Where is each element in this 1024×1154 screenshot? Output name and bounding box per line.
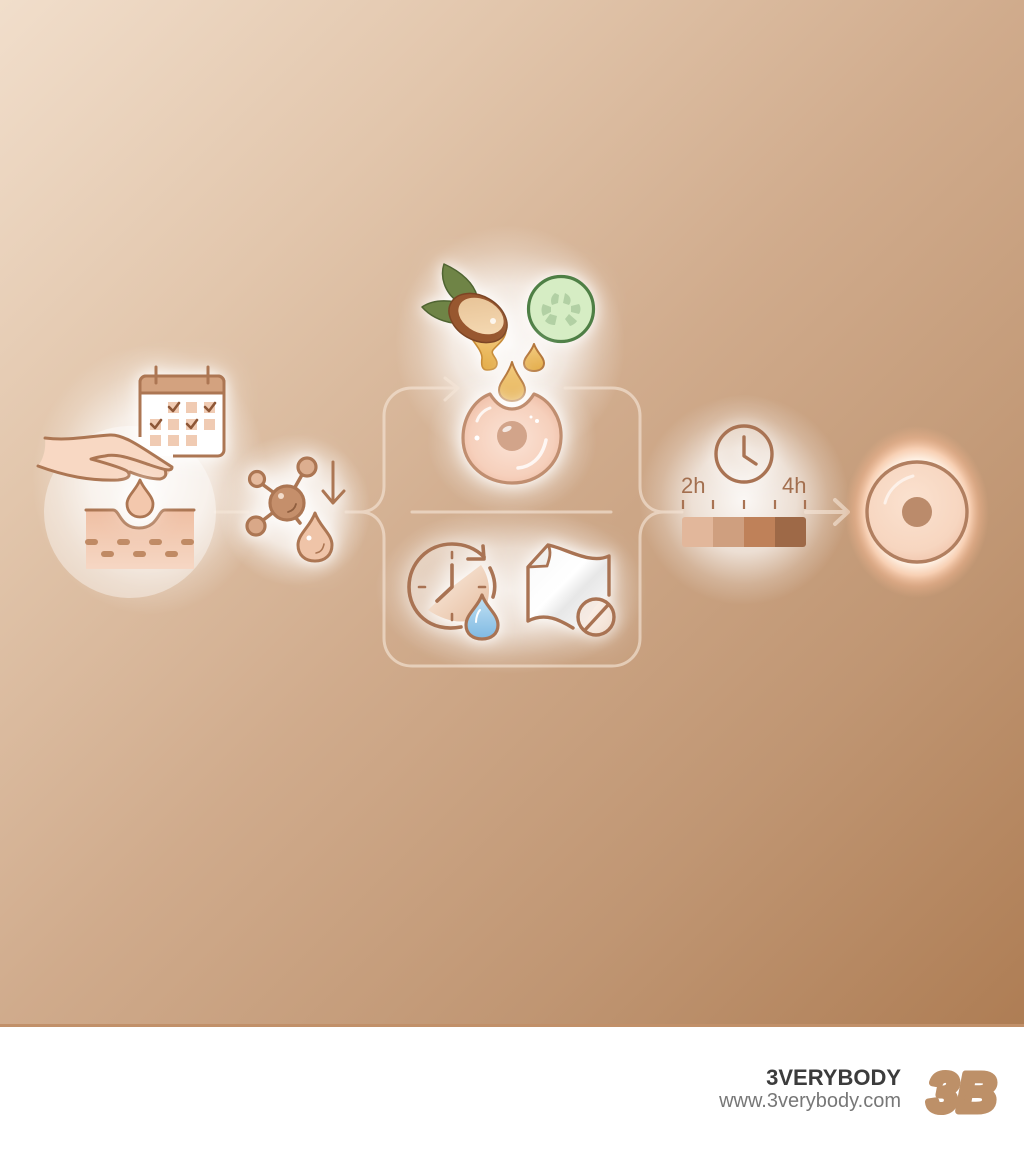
icon: clock with water drop — [409, 544, 498, 639]
icon: molecule with down arrow and drop — [247, 458, 344, 561]
icon: argan nut with leaves and oil — [422, 264, 516, 370]
footer brand name: 3VERYBODY — [766, 1065, 901, 1090]
icon: cucumber slice — [528, 276, 594, 342]
icon: small oil drop — [524, 344, 544, 371]
icon: calendar — [140, 367, 224, 456]
label: 2h: 2h — [681, 473, 705, 498]
pale circle — [44, 426, 216, 598]
footer logo: 3B — [928, 1063, 996, 1123]
footer band — [0, 1024, 1024, 1154]
icon: water drop on skin — [127, 480, 153, 517]
icon: glowing final cell — [845, 426, 989, 598]
connector flow lines — [215, 378, 848, 666]
icon: timer clock — [716, 426, 772, 482]
icon: wipe sheet with prohibition sign — [528, 545, 614, 635]
icon: hand — [38, 435, 172, 480]
icon group: skin with drop, hand and calendar — [38, 367, 224, 598]
footer url: www.3verybody.com — [718, 1090, 901, 1112]
colour bar — [682, 517, 806, 547]
icon: skin cell with notch — [463, 394, 561, 483]
label: 4h: 4h — [782, 473, 806, 498]
icon: large oil drop — [499, 362, 525, 401]
soft glows behind icons — [32, 225, 849, 674]
icon: skin cross-section — [85, 510, 194, 569]
time scale ticks — [683, 500, 805, 509]
